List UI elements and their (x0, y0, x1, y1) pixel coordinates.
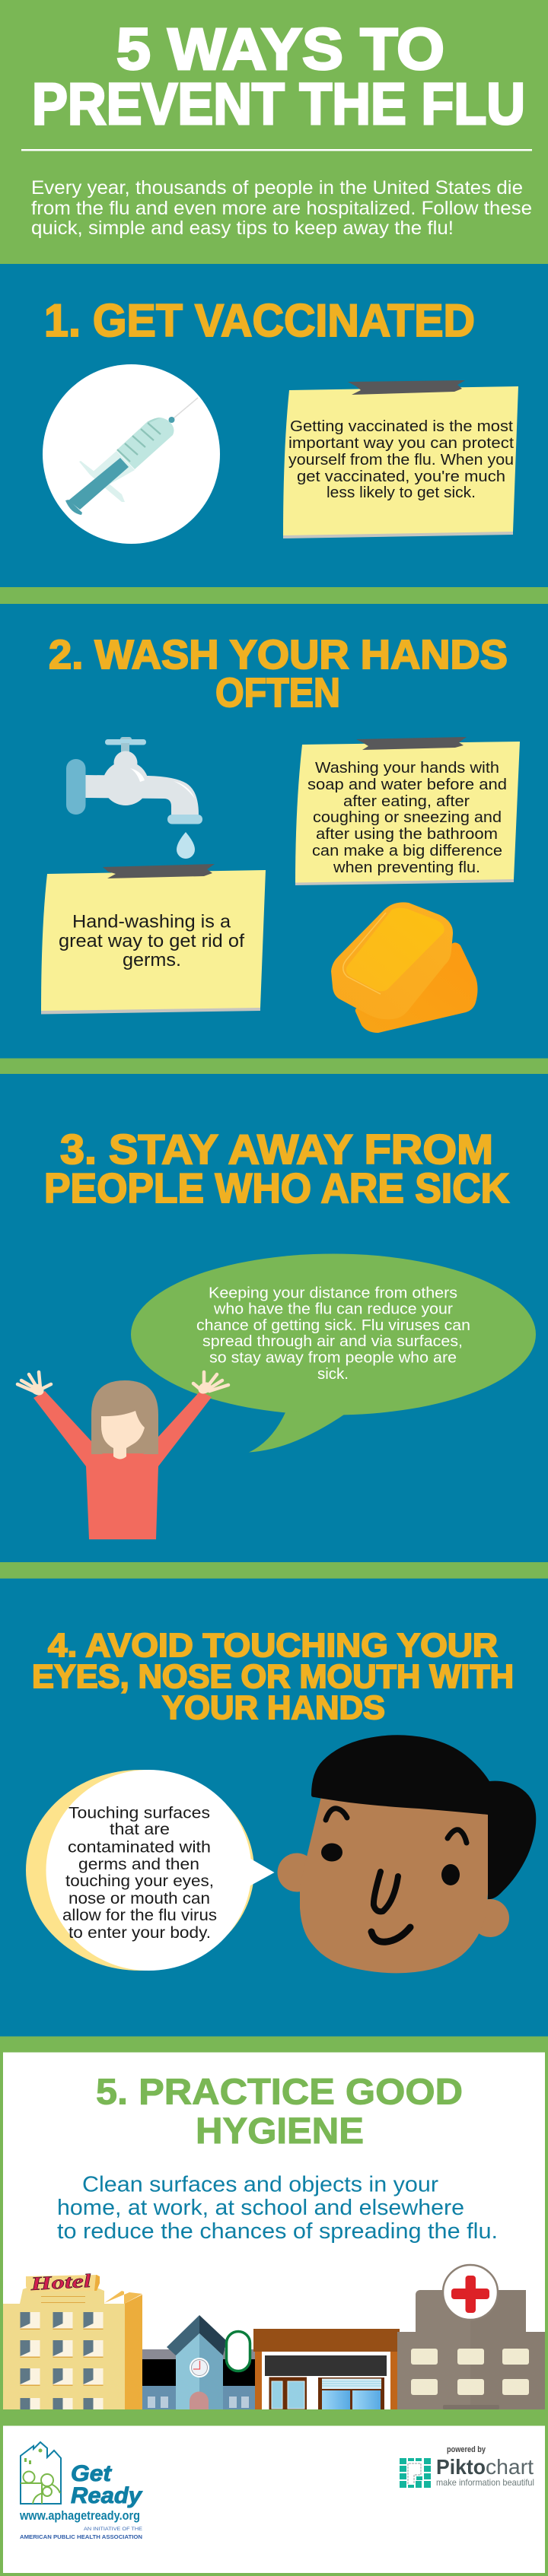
intro text: from the flu and even more are hospitalized. Follow these (31, 198, 532, 219)
callout circle: nose or mouth can (68, 1890, 210, 1907)
logo: Get Ready: Get (71, 2461, 113, 2486)
logo: Piktochart: make information beautiful (436, 2477, 534, 2488)
sticky note 1: important way you can protect (288, 435, 514, 452)
hotel sign text: Hotel (30, 2271, 91, 2295)
sticky note 2: can make a big difference (312, 843, 502, 859)
callout circle: that are (110, 1821, 170, 1838)
heading 4 (32, 1627, 514, 1726)
title (32, 17, 525, 137)
callout circle (26, 1770, 274, 1971)
icon: shop (253, 2329, 400, 2409)
heading 4: YOUR HANDS (162, 1689, 385, 1726)
logo: Piktochart: Pikto (436, 2455, 486, 2479)
icon: hospital (397, 2265, 545, 2409)
callout circle: touching your eyes, (65, 1872, 214, 1890)
icon: school (142, 2315, 255, 2409)
icon: face (277, 1735, 536, 1973)
callout circle: to enter your body. (68, 1924, 211, 1942)
panel: 4 avoid touching (0, 1579, 548, 2037)
logo: Piktochart: powered by (447, 2445, 486, 2454)
sticky note 3: great way to get rid of (59, 931, 244, 951)
sticky note 3 (41, 864, 266, 1015)
speech bubble: spread through air and via surfaces, (202, 1333, 463, 1350)
sticky note 2: Washing your hands with (315, 760, 499, 777)
icon: syringe in circle (43, 364, 220, 544)
sticky note 3: Hand-washing is a (72, 911, 231, 932)
sticky note 1: less likely to get sick. (327, 484, 476, 501)
sticky note 2: after using the bathroom (316, 826, 498, 843)
title: 5 WAYS TO (116, 17, 444, 82)
sticky note 2: after eating, after (343, 793, 470, 810)
logo: Piktochart: chart (486, 2455, 534, 2479)
sticky note 1: Getting vaccinated is the most (290, 418, 513, 435)
sticky note 2: when preventing flu. (333, 859, 480, 876)
heading 4: EYES, NOSE OR MOUTH WITH (32, 1658, 514, 1695)
heading 3 (44, 1126, 509, 1212)
icon: faucet (66, 737, 202, 859)
heading 2: OFTEN (215, 670, 340, 716)
sticky note 1: yourself from the flu. When you (288, 452, 514, 469)
intro text: quick, simple and easy tips to keep away the flu! (31, 218, 454, 239)
panel: 1 get vaccinated (0, 264, 548, 587)
intro text: Every year, thousands of people in the United States die (31, 177, 523, 199)
logo: Get Ready: www.aphagetready.org (19, 2508, 140, 2523)
speech bubble: so stay away from people who are (209, 1350, 457, 1367)
panel: header (0, 0, 548, 264)
heading 5: HYGIENE (196, 2111, 364, 2152)
speech bubble (131, 1253, 536, 1453)
callout circle: contaminated with (68, 1839, 211, 1856)
logo: Get Ready: AMERICAN PUBLIC HEALTH ASSOCIATION (20, 2535, 142, 2540)
heading 3: PEOPLE WHO ARE SICK (44, 1164, 509, 1212)
heading 5: 5. PRACTICE GOOD (96, 2072, 463, 2113)
hygiene text (57, 2172, 498, 2244)
speech bubble: sick. (317, 1366, 349, 1383)
sticky note 2: coughing or sneezing and (313, 809, 502, 826)
heading 3: 3. STAY AWAY FROM (60, 1126, 493, 1173)
panel: footer (0, 2409, 548, 2576)
icon: hotel (3, 2271, 142, 2409)
heading 5 (96, 2072, 463, 2152)
sticky note 1: get vaccinated, you're much (297, 469, 505, 485)
logo: Get Ready: Ready (71, 2483, 142, 2508)
icon: soap bars (331, 902, 478, 1033)
heading 2: 2. WASH YOUR HANDS (49, 632, 508, 678)
hygiene text: home, at work, at school and elsewhere (57, 2196, 464, 2220)
speech bubble: Keeping your distance from others (209, 1285, 457, 1302)
sticky note 2: soap and water before and (307, 777, 507, 793)
logo: Get Ready (19, 2442, 142, 2540)
speech bubble: chance of getting sick. Flu viruses can (196, 1317, 470, 1334)
panel: 5 good hygiene (0, 2052, 548, 2409)
heading 1: 1. GET VACCINATED (44, 295, 475, 346)
logo: Piktochart (400, 2445, 534, 2488)
speech bubble: who have the flu can reduce your (213, 1301, 453, 1317)
panel: 2 wash your hands (0, 604, 548, 1059)
heading 2 (49, 632, 508, 716)
callout circle: germs and then (78, 1856, 199, 1873)
icon: person with raised arms (18, 1372, 228, 1539)
callout circle: allow for the flu virus (62, 1907, 217, 1924)
intro text (31, 177, 532, 239)
sticky note 3: germs. (123, 950, 181, 970)
sticky note 2 (295, 737, 520, 885)
sticky note 1 (283, 380, 518, 538)
hygiene text: to reduce the chances of spreading the flu. (57, 2219, 498, 2244)
logo: Get Ready: AN INITIATIVE OF THE (84, 2527, 142, 2532)
heading 4: 4. AVOID TOUCHING YOUR (48, 1627, 498, 1664)
panel: 3 stay away (0, 1074, 548, 1562)
hygiene text: Clean surfaces and objects in your (82, 2172, 438, 2196)
callout circle: Touching surfaces (68, 1805, 210, 1822)
